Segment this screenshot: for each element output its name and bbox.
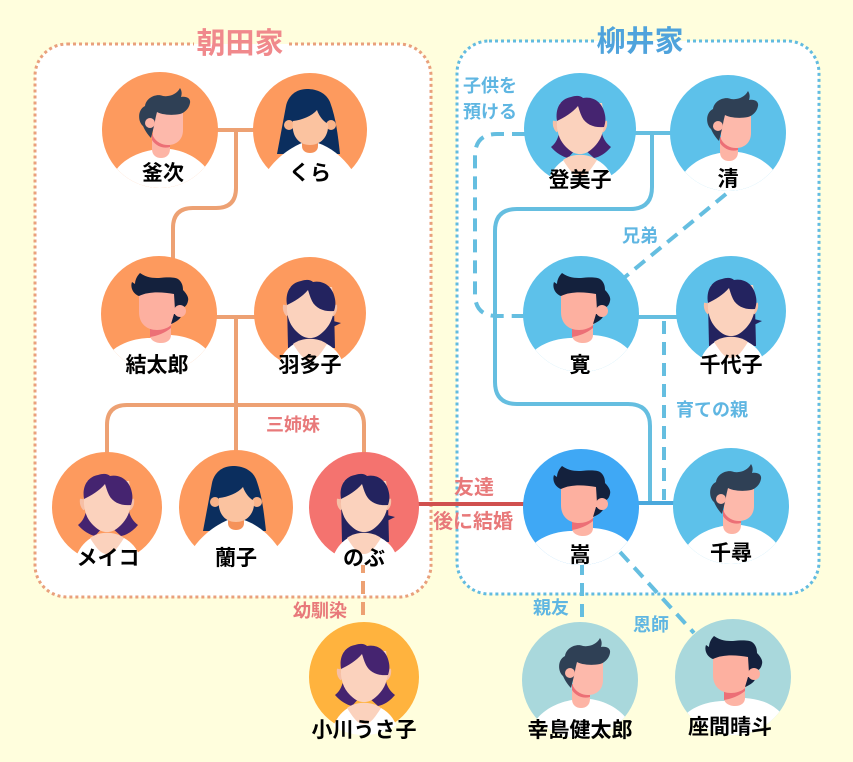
person: のぶ [309, 452, 419, 570]
connector: のぶ and 嵩 [415, 502, 527, 506]
person: のぶ: のぶ [343, 547, 385, 570]
person: 寛: 寛 [570, 354, 590, 377]
connector: 千代子 to 千尋 foster parents [662, 321, 666, 500]
person: 小川うさ子: 小川うさ子 [312, 719, 416, 742]
person: 清: 清 [718, 168, 738, 191]
person: メイコ [52, 452, 162, 570]
label: 子供を預ける: 預ける [463, 102, 517, 122]
connector: のぶ to 小川 dashed [361, 560, 365, 632]
person: 釜次: 釜次 [142, 162, 184, 185]
person: 千尋 [673, 448, 789, 566]
label: 友達: 友達 [454, 476, 494, 499]
connector: 清 to 寛 brothers dashed [625, 194, 726, 277]
connector: 結太郎 and 羽多子 to daughters [107, 317, 364, 455]
person: 結太郎: 結太郎 [126, 354, 188, 377]
label: 親友: 親友 [533, 598, 569, 618]
label: 恩師: 恩師 [633, 615, 669, 635]
label: 後に結婚: 後に結婚 [433, 510, 513, 533]
connector: 登美子 to 寛 dashed [475, 134, 525, 316]
person: 幸島健太郎 [522, 622, 638, 742]
person: 千尋: 千尋 [710, 542, 752, 565]
person: くら: くら [289, 162, 331, 185]
panel: 朝田家 [35, 44, 431, 597]
label: 子供を預ける [463, 76, 517, 122]
person: くら [253, 73, 367, 190]
panel: 柳井家 [457, 41, 819, 594]
person: 小川うさ子 [309, 622, 419, 742]
label: 兄弟: 兄弟 [622, 226, 658, 246]
connector: 嵩 and 千尋 [637, 501, 675, 505]
connector: 嵩 to 幸島 dashed [580, 562, 584, 628]
connector: 寛 and 千代子 [637, 315, 677, 319]
person: 座間晴斗 [675, 619, 791, 739]
person: メイコ: メイコ [76, 547, 140, 570]
connector: 登美子 and 清 to 嵩 [495, 133, 672, 503]
connector: 釜次 and くら to 結太郎 [173, 130, 255, 260]
person: 清 [670, 75, 786, 193]
label: 子供を預ける: 子供を [463, 76, 517, 96]
label: 幼馴染: 幼馴染 [293, 601, 347, 621]
label: 三姉妹: 三姉妹 [266, 415, 320, 435]
person: 羽多子 [254, 257, 366, 377]
person: 釜次 [102, 72, 218, 190]
person: 千代子: 千代子 [700, 354, 762, 377]
person: 寛 [523, 256, 639, 377]
person: 千代子 [676, 256, 786, 377]
connector: 嵩 to 座間 dashed [620, 552, 694, 633]
person: 蘭子: 蘭子 [215, 547, 257, 570]
person: 幸島健太郎: 幸島健太郎 [528, 719, 632, 742]
person: 嵩: 嵩 [570, 544, 590, 567]
person: 登美子 [524, 73, 636, 192]
person: 座間晴斗: 座間晴斗 [688, 716, 772, 739]
person: 結太郎 [101, 256, 217, 377]
person: 羽多子: 羽多子 [278, 354, 342, 377]
label: 育ての親: 育ての親 [676, 400, 748, 420]
person: 蘭子 [179, 450, 293, 570]
person: 嵩 [523, 449, 639, 567]
person: 登美子: 登美子 [548, 169, 612, 192]
heading: 朝田家: 朝田家 [196, 27, 284, 60]
heading: 柳井家: 柳井家 [596, 25, 684, 58]
